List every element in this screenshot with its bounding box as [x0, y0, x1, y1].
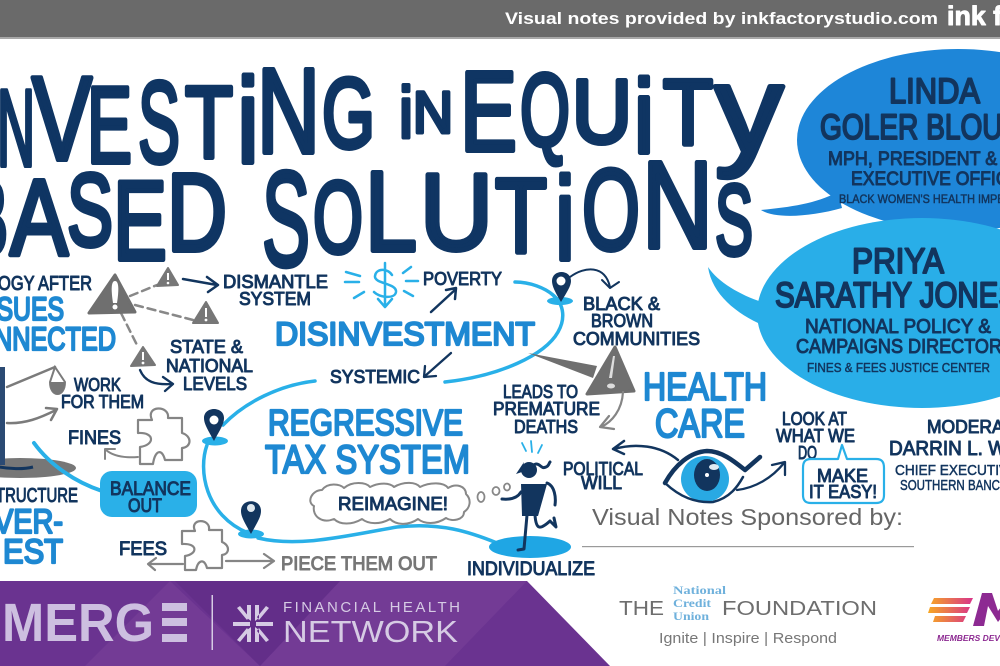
icon: puzzle piece fines [138, 408, 190, 464]
title: T [663, 60, 713, 164]
title: N [413, 80, 453, 146]
logo: National Credit Union Foundation [619, 583, 877, 647]
title: i [237, 52, 259, 188]
heading: regressive tax system: TAX SYSTEM [265, 438, 470, 482]
text: leads to premature deaths: LEADS TO [503, 382, 578, 402]
speech bubble: Priya Sarathy Jones [708, 218, 1000, 408]
arrow to systemic [424, 353, 451, 377]
title: i [399, 74, 413, 154]
speech bubble: Priya Sarathy Jones: PRIYA [852, 242, 945, 281]
title: S [67, 152, 113, 268]
title: N [257, 42, 320, 178]
title: E [113, 158, 167, 284]
callout: balance out: OUT [128, 496, 162, 517]
title: E [460, 48, 517, 174]
title: T [495, 158, 547, 276]
logo: National Credit Union Foundation: Ignite | Inspire | Respond [659, 630, 837, 647]
warning network icons [89, 268, 218, 366]
text: state and national levels: LEVELS [183, 374, 247, 394]
header bar [0, 0, 1000, 39]
logo: National Credit Union Foundation: National [673, 583, 727, 597]
logo: MERGE: MERG [2, 593, 154, 653]
icon: dollar sign with rays [345, 263, 418, 307]
logo: National Credit Union Foundation: Credit [673, 596, 711, 610]
text: look at what we do: DO [798, 443, 817, 463]
text: dismantle system: SYSTEM [239, 289, 311, 309]
pin: black and brown communities [547, 272, 573, 305]
thought cloud: reimagine [310, 483, 470, 524]
scale icon [0, 367, 76, 478]
text: black and brown communities: COMMUNITIES [573, 329, 700, 349]
panel: technology after issues connected: OGY AFTER [0, 273, 92, 295]
logo: Financial Health Network [233, 599, 460, 649]
arrow from eye to look at what we do [737, 462, 785, 490]
title: S [138, 58, 180, 188]
arrow to levels [140, 370, 173, 391]
text: leads to premature deaths: PREMATURE [493, 399, 600, 419]
callout: make it easy: IT EASY! [809, 482, 877, 502]
thought cloud: reimagine: REIMAGINE! [338, 494, 448, 514]
text: black and brown communities: BROWN [591, 311, 653, 331]
arrow to poverty [431, 288, 456, 312]
text: dismantle system: DISMANTLE [223, 272, 328, 292]
speech bubble: Linda Goler Blount [761, 49, 1000, 231]
arrow to fees [148, 558, 183, 570]
title: O [582, 146, 640, 274]
heading: regressive tax system: REGRESSIVE [268, 402, 463, 443]
text: black and brown communities [573, 294, 700, 349]
text: individualize: INDIVIDUALIZE [467, 559, 595, 580]
text: systemic: SYSTEMIC [330, 367, 420, 387]
text: leads to premature deaths [493, 382, 600, 437]
speech bubble: Linda Goler Blount: LINDA [889, 72, 981, 111]
thought bubbles [478, 484, 510, 502]
text: state and national levels: STATE & [170, 337, 243, 357]
text: infrastructure over-invest [0, 485, 78, 571]
arrow to dismantle system [183, 277, 218, 292]
logo: National Credit Union Foundation: THE [619, 598, 664, 620]
text: infrastructure over-invest: EST [3, 533, 63, 571]
heading: regressive tax system [265, 402, 470, 482]
text: look at what we do: LOOK AT [782, 409, 847, 429]
logo: National Credit Union Foundation: FOUNDATION [722, 598, 877, 620]
text: poverty: POVERTY [423, 269, 502, 289]
title: E [87, 64, 132, 186]
logo: National Credit Union Foundation: Union [673, 609, 709, 623]
title: y [715, 41, 783, 179]
pin: fees [238, 501, 264, 538]
text: political will [563, 459, 643, 493]
title: U [420, 152, 493, 274]
text: look at what we do: WHAT WE [776, 426, 855, 446]
title: D [167, 152, 227, 274]
text: political will: POLITICAL [563, 459, 643, 479]
heading: disinvestment: DISINVESTMENT [275, 316, 535, 352]
figure: running person [489, 441, 571, 558]
title: S [262, 144, 310, 294]
icon: puzzle piece fees [182, 521, 228, 570]
sponsor heading: Visual Notes Sponsored by: [592, 504, 903, 530]
icon: large warning triangle [528, 347, 634, 394]
heading: health care [643, 366, 767, 446]
title [0, 41, 783, 294]
heading: health care: HEALTH [643, 366, 767, 409]
logo: Financial Health Network: NETWORK [283, 614, 458, 649]
connector to balance out [34, 443, 102, 491]
text: work for them [61, 375, 144, 412]
flow path: systemic to individualize [204, 381, 497, 543]
pin: regressive tax [202, 409, 228, 446]
text: dismantle system [223, 272, 328, 309]
text: fees: FEES [119, 539, 167, 560]
title: G [322, 58, 375, 168]
arrow to political will [613, 441, 678, 460]
title: O [313, 160, 363, 274]
panel: technology after issues connected [0, 268, 218, 366]
callout: balance out: BALANCE [110, 479, 191, 500]
arrow from puzzle to fines [105, 449, 138, 459]
arrow to premature deaths [600, 392, 623, 429]
heading: health care: CARE [655, 402, 745, 446]
arrow to work for them [7, 408, 57, 423]
text: state and national levels [166, 337, 253, 394]
text: look at what we do [776, 409, 855, 463]
title: T [185, 66, 233, 180]
text: piece them out: PIECE THEM OUT [281, 554, 437, 575]
title: S [715, 164, 753, 276]
header credit text: Visual notes provided by inkfactorystudio.com [505, 9, 938, 28]
text: leads to premature deaths: DEATHS [514, 417, 578, 437]
text: political will: WILL [581, 473, 622, 493]
title: i [555, 154, 575, 286]
title: Q [520, 52, 570, 168]
logo: Members Development [928, 593, 1000, 643]
text: black and brown communities: BLACK & [583, 294, 660, 314]
text: moderator [889, 417, 1000, 494]
title: i [634, 60, 654, 176]
arrow to communities [570, 269, 619, 288]
title: N [642, 138, 713, 274]
arrow to piece them out [226, 554, 274, 568]
text: work for them: FOR THEM [61, 392, 144, 412]
title: L [365, 148, 417, 274]
icon: eye [665, 451, 760, 502]
callout: make it easy [803, 445, 884, 503]
speech bubble: Priya Sarathy Jones: NATIONAL POLICY & [805, 316, 992, 338]
text: fines: FINES [68, 428, 121, 449]
logo: Financial Health Network: FINANCIAL HEALTH [283, 599, 460, 616]
callout: balance out [100, 471, 197, 517]
text: work for them: WORK [74, 375, 121, 395]
text: state and national levels: NATIONAL [166, 356, 253, 376]
flow path: poverty to systemic [445, 282, 563, 382]
title: A [10, 156, 68, 278]
title: V [32, 52, 92, 186]
title: U [572, 62, 632, 162]
footer banner: purple [0, 581, 610, 666]
callout: make it easy: MAKE [817, 466, 868, 486]
